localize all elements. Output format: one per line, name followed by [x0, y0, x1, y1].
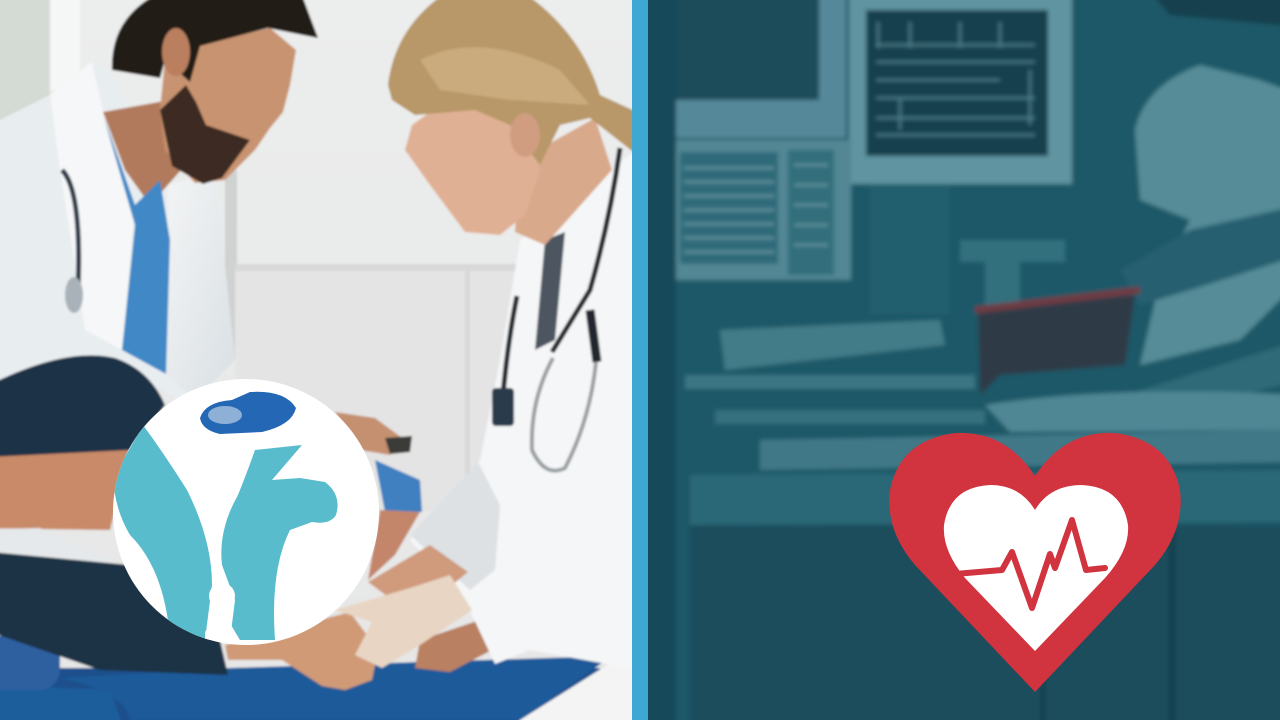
beard — [160, 85, 250, 184]
coat — [411, 154, 632, 666]
stethoscope — [62, 170, 79, 290]
right teal form — [221, 445, 338, 640]
stethoscope — [503, 148, 620, 395]
nurse silhouette — [1123, 0, 1280, 392]
outer red heart — [889, 433, 1181, 692]
inner white heart — [944, 485, 1128, 651]
forearm — [368, 545, 468, 602]
knee joint — [209, 586, 235, 601]
monitor: main — [849, 0, 1072, 184]
icon: heart with pulse — [889, 433, 1181, 692]
face — [160, 28, 296, 183]
blonde hair — [388, 0, 650, 165]
face — [405, 105, 540, 235]
pulse line — [955, 520, 1105, 608]
equipment console — [676, 140, 851, 280]
patient leg — [0, 355, 492, 690]
scrubs — [104, 118, 170, 374]
gloved hand — [335, 575, 472, 668]
female doctor — [335, 0, 650, 672]
left teal form — [113, 425, 212, 640]
bed and equipment — [685, 184, 1280, 720]
hair — [112, 0, 318, 82]
panel: clinic photo — [0, 0, 670, 720]
left column shadow — [648, 0, 676, 720]
neck — [515, 118, 612, 245]
male doctor — [0, 0, 318, 405]
clinic wall background — [0, 0, 632, 670]
monitor: top left — [676, 0, 846, 138]
coat — [0, 95, 51, 126]
panel: ICU background — [620, 0, 1280, 720]
treatment table — [0, 636, 660, 720]
blue capsule — [200, 392, 296, 434]
divider stripe — [632, 0, 648, 720]
icon: anatomy circle — [110, 376, 382, 648]
ear — [162, 28, 190, 76]
neck — [102, 100, 182, 197]
